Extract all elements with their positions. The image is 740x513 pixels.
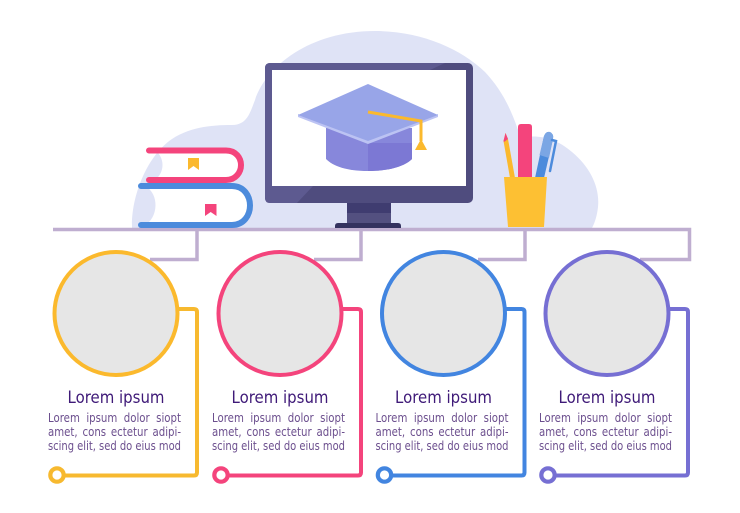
heading: Lorem ipsum xyxy=(68,388,164,408)
photo circle xyxy=(54,252,178,375)
pink book xyxy=(149,150,243,180)
node xyxy=(378,468,391,482)
heading: Lorem ipsum xyxy=(395,388,492,408)
connector frame xyxy=(64,309,197,476)
cup xyxy=(504,177,547,227)
body text: Lorem ipsum dolor siopt xyxy=(212,410,345,425)
connector frame xyxy=(555,309,688,476)
panel: step 2 xyxy=(212,252,361,482)
body text: amet, cons ectetur adipi- xyxy=(48,424,181,439)
monitor frame xyxy=(265,63,473,203)
monitor screen xyxy=(272,70,466,186)
photo circle xyxy=(218,252,342,375)
body text xyxy=(48,410,181,453)
monitor stand xyxy=(335,202,401,228)
body text: Lorem ipsum dolor siopt xyxy=(376,410,509,425)
node xyxy=(541,468,555,482)
icon: monitor with graduation cap xyxy=(265,63,473,228)
photo circle xyxy=(382,252,505,375)
heading: Lorem ipsum xyxy=(558,388,656,408)
graduation cap xyxy=(298,84,438,171)
body text: amet, cons ectetur adipi- xyxy=(376,424,508,439)
body text: Lorem ipsum dolor siopt xyxy=(539,410,672,425)
background blob xyxy=(132,31,598,228)
body text xyxy=(539,410,672,453)
connector lines xyxy=(53,230,690,260)
ruler xyxy=(518,124,532,178)
body text: scing elit, sed do eius mod xyxy=(376,438,508,453)
body text xyxy=(376,410,509,453)
icon: pencil cup xyxy=(504,124,556,227)
node xyxy=(50,468,64,482)
pencil xyxy=(504,133,515,178)
blue book xyxy=(141,186,251,225)
panel: step 3 xyxy=(376,252,524,482)
body text: Lorem ipsum dolor siopt xyxy=(48,410,181,425)
body text: amet, cons ectetur adipi- xyxy=(212,424,345,439)
panel: step 4 xyxy=(539,252,688,482)
panel: step 1 xyxy=(48,252,197,482)
body text: amet, cons ectetur adipi- xyxy=(539,424,672,439)
body text: scing elit, sed do eius mod xyxy=(539,438,672,453)
node xyxy=(214,468,228,482)
photo circle xyxy=(546,252,668,375)
body text: scing elit, sed do eius mod xyxy=(48,438,181,453)
connector frame xyxy=(391,309,524,476)
icon: stack of books xyxy=(141,150,251,225)
pen xyxy=(535,132,553,178)
body text xyxy=(212,410,345,453)
connector frame xyxy=(228,309,361,476)
body text: scing elit, sed do eius mod xyxy=(212,438,345,453)
heading: Lorem ipsum xyxy=(232,388,328,408)
